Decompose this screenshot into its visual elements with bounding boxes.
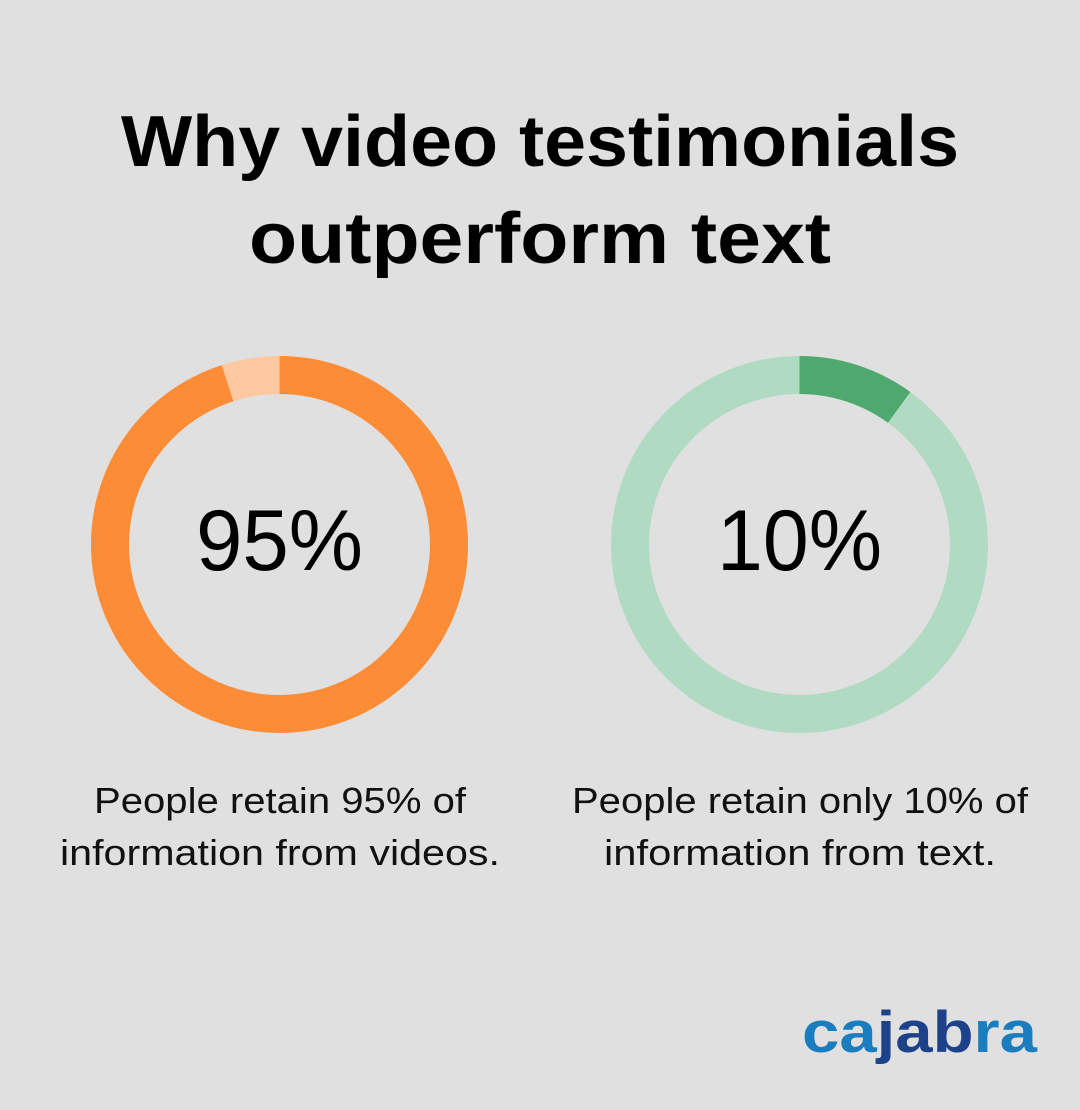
caption: videos (60, 780, 500, 873)
percentage: 10%: 10% (717, 493, 882, 589)
donut chart: videos 95% (110, 375, 449, 714)
title: Why video testimonials (121, 102, 959, 182)
donut chart: text 10% (630, 375, 969, 714)
title (121, 102, 959, 279)
percentage: 95%: 95% (196, 493, 363, 589)
caption: text (572, 780, 1029, 873)
title: outperform text (249, 199, 831, 279)
logo: cajabra: cajabra (802, 1000, 1038, 1065)
caption: text: People retain only 10% of (572, 780, 1029, 821)
caption: videos: information from videos. (60, 832, 500, 873)
caption: text: information from text. (604, 832, 996, 873)
caption: videos: People retain 95% of (94, 780, 467, 821)
